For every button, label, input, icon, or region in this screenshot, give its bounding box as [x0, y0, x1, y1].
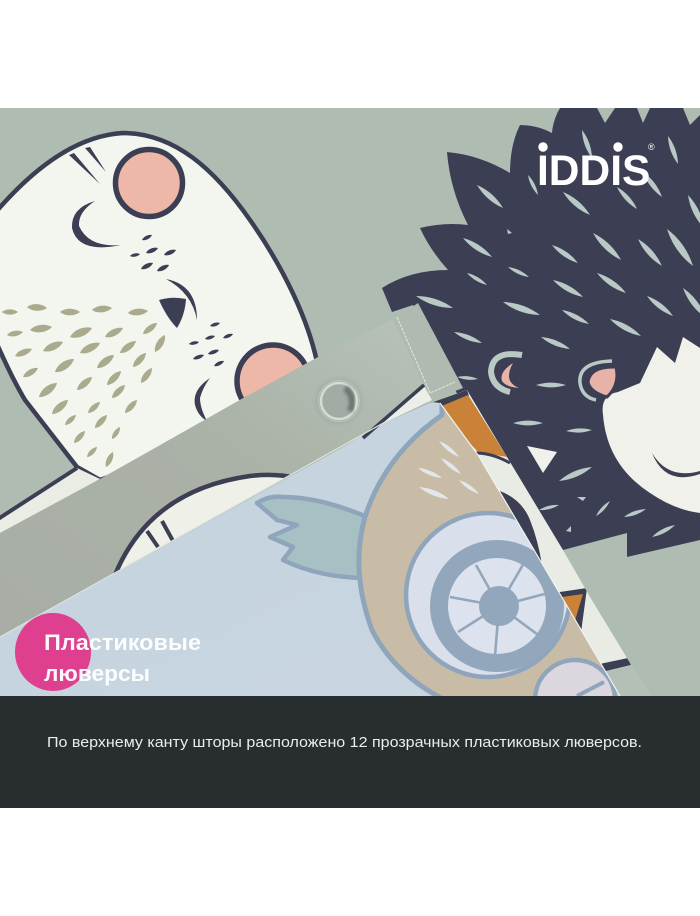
strip stitching: [440, 403, 620, 696]
pink accent circle: [15, 613, 91, 691]
lining fabric: [0, 403, 440, 696]
heading second line: люверсы: [44, 661, 150, 686]
strip dark line: [476, 453, 510, 463]
strip dark crescent: [490, 488, 542, 565]
hedgehog eye: [652, 453, 700, 477]
hedgehog face: [603, 337, 700, 513]
curtain lining with bird print: [0, 403, 620, 696]
curtain fabric background: [0, 108, 700, 696]
mouse olive fur marks: [2, 304, 168, 468]
cream fold at hem corner: [384, 387, 432, 423]
hedgehog body: [382, 108, 700, 557]
strip fabric: [433, 390, 650, 696]
brand logo: IDDIS: ®: [648, 142, 655, 152]
mouse shoulder line: [0, 468, 77, 519]
strip orange patch: [437, 395, 507, 457]
illustration: sleeping mouse: [0, 133, 322, 533]
mouse eye top: [72, 201, 121, 247]
mouse nose: [159, 298, 186, 328]
hem printed arc with cream fill: [113, 475, 296, 577]
side hem strip with print: [433, 390, 660, 700]
hedgehog spines: [415, 129, 700, 539]
diagonal line: [577, 682, 604, 696]
bird body: [359, 400, 640, 700]
mouse lower ear: [234, 342, 308, 400]
mouse whisker dots: [130, 233, 234, 368]
lower hem stitching: [0, 422, 385, 637]
hem fabric: [0, 357, 323, 636]
bird wing: [257, 497, 367, 578]
mouse top ear: [116, 150, 182, 216]
pink shape: [533, 658, 617, 696]
bird feather marks: [417, 439, 480, 501]
mouse fold lines: [69, 147, 106, 184]
dark line at hem corner: [363, 385, 424, 438]
strip orange triangle: [553, 588, 587, 640]
strip dark stripe: [595, 658, 631, 673]
strip sage end: [598, 665, 660, 700]
curtain top hem band: [0, 357, 323, 636]
dark caption band: [0, 696, 700, 808]
corner flap of hem: [393, 303, 463, 400]
flap stitching: [397, 317, 455, 393]
heading: Plastic eyelets: Пластиковые: [44, 630, 201, 655]
illustration: hedgehog: [382, 108, 700, 557]
grommet eyelet: [315, 377, 363, 425]
brand logo: IDDIS: IDDIS: [537, 148, 650, 195]
hedgehog chest triangle: [527, 446, 557, 473]
hedgehog right ear: [580, 361, 617, 400]
caption text: По верхнему канту шторы расположено 12 прозрачных пластиковых люверсов.: [47, 734, 642, 751]
hedgehog left ear: [491, 354, 522, 392]
mouse eye lower: [195, 378, 210, 421]
photo: curtain close-up: [0, 108, 700, 740]
mouse nose arc: [166, 279, 197, 320]
bird eye disc: [406, 513, 570, 677]
mouse shoulder strip: [0, 468, 100, 533]
mouse head outline: [0, 133, 322, 480]
bird eye wheel: [439, 549, 555, 663]
strip dark top band: [434, 390, 469, 406]
